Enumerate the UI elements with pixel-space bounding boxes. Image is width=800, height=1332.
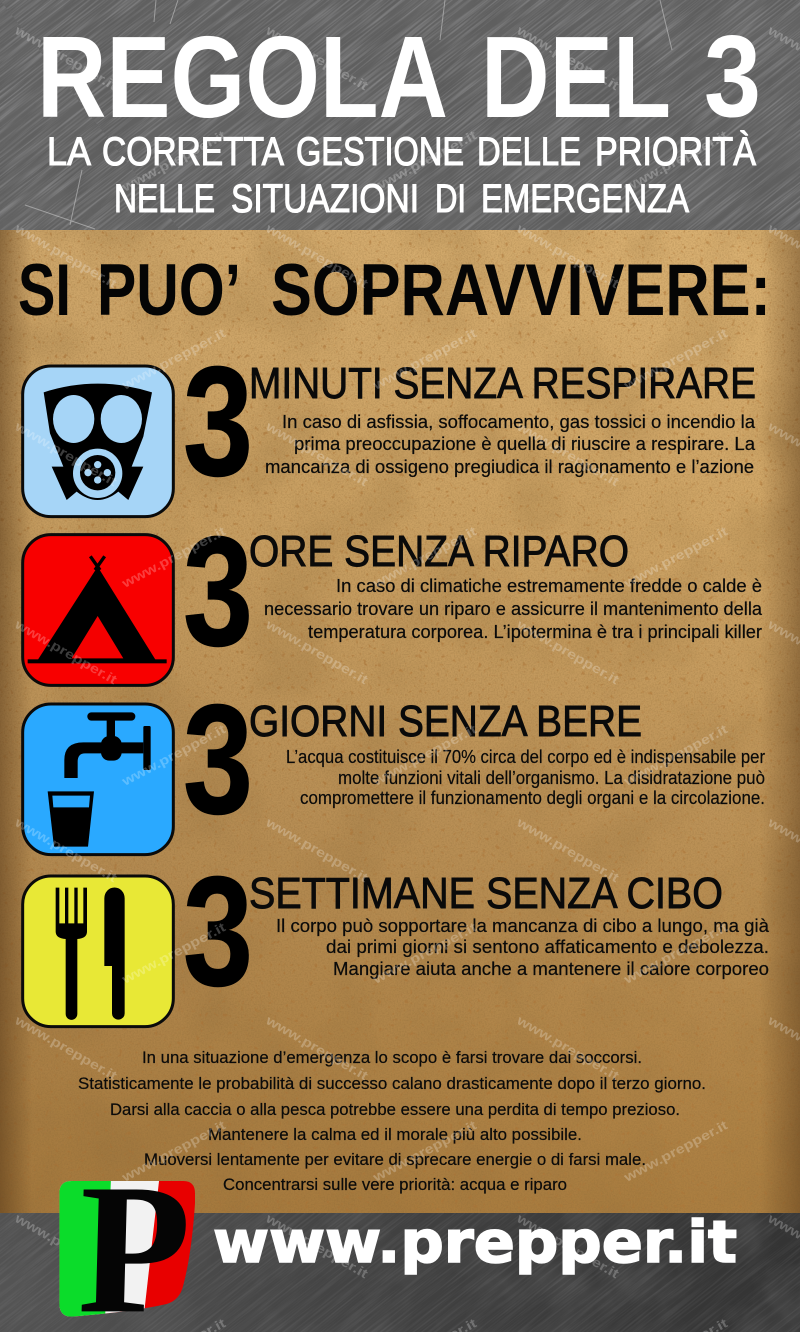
title (37, 11, 761, 142)
block: giorni senza bere: molte funzioni vitali dell’organismo. La disidratazione può (338, 768, 765, 788)
closing advice text: Darsi alla caccia o alla pesca potrebbe essere una perdita di tempo prezioso. (110, 1101, 680, 1119)
heading: si puo sopravvivere: PUO’ (97, 250, 241, 331)
subtitle: EMERGENZA (481, 177, 689, 221)
closing advice text: Mantenere la calma ed il morale più alto possibile. (208, 1126, 582, 1144)
title: DEL (481, 12, 671, 142)
closing advice text: Concentrarsi sulle vere priorità: acqua e riparo (223, 1176, 567, 1194)
block: ore senza riparo: In caso di climatiche estremamente fredde o calde è (336, 576, 762, 596)
block: settimane senza cibo: SETTIMANE SENZA CIBO (249, 869, 723, 918)
closing advice text: Muoversi lentamente per evitare di sprecare energie o di farsi male. (144, 1151, 646, 1169)
block: giorni senza bere: L’acqua costituisce il 70% circa del corpo ed è indispensabile per (286, 747, 765, 767)
heading: si puo sopravvivere (18, 250, 771, 331)
subtitle (47, 129, 756, 221)
block: giorni senza bere: compromettere il funzionamento degli organi e la circolazione. (300, 788, 765, 808)
panel: slate footer background (0, 1213, 800, 1332)
block: giorni senza bere (249, 697, 765, 808)
logo: italian flag P (59, 1181, 195, 1317)
number 3: ore: 3 (183, 505, 253, 679)
title: 3 (704, 11, 761, 141)
subtitle: NELLE (114, 177, 215, 221)
website url: www.prepper.it (213, 1208, 737, 1276)
subtitle: LA (47, 130, 91, 174)
block: minuti senza respirare: mancanza di ossigeno pregiudica il ragionamento e l’azione (265, 457, 754, 477)
panel: paper background (0, 230, 800, 1213)
block: ore senza riparo: necessario trovare un riparo e assicurre il mantenimento della (264, 599, 763, 619)
subtitle: SITUAZIONI (231, 177, 419, 221)
block: giorni senza bere: GIORNI SENZA BERE (249, 697, 642, 746)
block: settimane senza cibo: Mangiare aiuta anche a mantenere il calore corporeo (333, 959, 769, 979)
subtitle: CORRETTA (102, 130, 284, 174)
heading: si puo sopravvivere: SI (18, 250, 71, 331)
block: minuti senza respirare: In caso di asfissia, soffocamento, gas tossici o incendio la (282, 412, 756, 432)
closing advice text: In una situazione d’emergenza lo scopo è farsi trovare dai soccorsi. (142, 1049, 642, 1067)
block: settimane senza cibo (249, 869, 770, 979)
subtitle: DELLE (477, 130, 581, 174)
block: ore senza riparo (249, 527, 763, 642)
block: minuti senza respirare (249, 359, 756, 477)
number 3: minuti: 3 (183, 335, 253, 509)
title: REGOLA (37, 12, 448, 142)
closing advice text (78, 1049, 706, 1194)
subtitle: DI (435, 177, 466, 221)
icon: tent (23, 535, 173, 685)
subtitle: PRIORITÀ (595, 129, 756, 174)
icon: gas mask (23, 366, 173, 517)
block: ore senza riparo: temperatura corporea. L’ipotermina è tra i principali killer (308, 622, 762, 642)
panel: slate header background (0, 0, 800, 230)
closing advice text: Statisticamente le probabilità di successo calano drasticamente dopo il terzo giorno. (78, 1075, 706, 1093)
block: ore senza riparo: ORE SENZA RIPARO (249, 527, 629, 576)
block: minuti senza respirare: prima preoccupazione è quella di riuscire a respirare. La (294, 434, 756, 454)
subtitle: GESTIONE (296, 130, 464, 174)
number 3: settimane: 3 (183, 845, 253, 1019)
number 3: giorni: 3 (183, 673, 253, 847)
icon: fork and knife (23, 876, 173, 1027)
icon: water tap and glass (23, 704, 173, 855)
block: settimane senza cibo: Il corpo può sopportare la mancanza di cibo a lungo, ma già (276, 916, 770, 936)
block: settimane senza cibo: dai primi giorni si sentono affaticamento e debolezza. (326, 937, 769, 957)
